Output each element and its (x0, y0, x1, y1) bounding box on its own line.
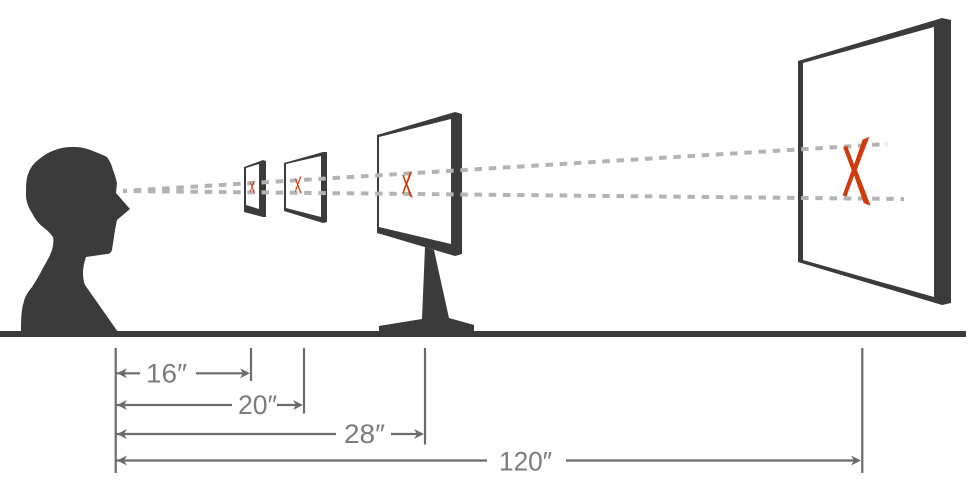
dimension: 28 inches: 28″ (344, 419, 385, 449)
icon: head silhouette (21, 147, 130, 332)
sight lines (123, 144, 904, 199)
target letter X on 16 inch monitor: X (249, 177, 255, 198)
dimension: 28 inches (116, 348, 425, 449)
monitor: 16 inch distance (244, 160, 266, 217)
monitor: 120 inch distance (798, 18, 951, 305)
ground line (0, 331, 966, 337)
dimension: 16 inches (116, 348, 251, 389)
dimension: 20 inches: 20″ (238, 390, 277, 420)
dimension: 16 inches: 16″ (146, 359, 187, 389)
target letter X on 120 inch monitor: X (843, 116, 872, 227)
monitor: 28 inch distance with stand (377, 112, 474, 332)
target letter X on 20 inch monitor: X (295, 172, 302, 200)
monitor: 20 inch distance (284, 152, 327, 223)
target letter X on 28 inch monitor: X (402, 162, 413, 206)
dimension: 120 inches: 120″ (499, 447, 552, 477)
dimension: 20 inches (116, 348, 304, 420)
dimension: 120 inches (116, 348, 862, 477)
